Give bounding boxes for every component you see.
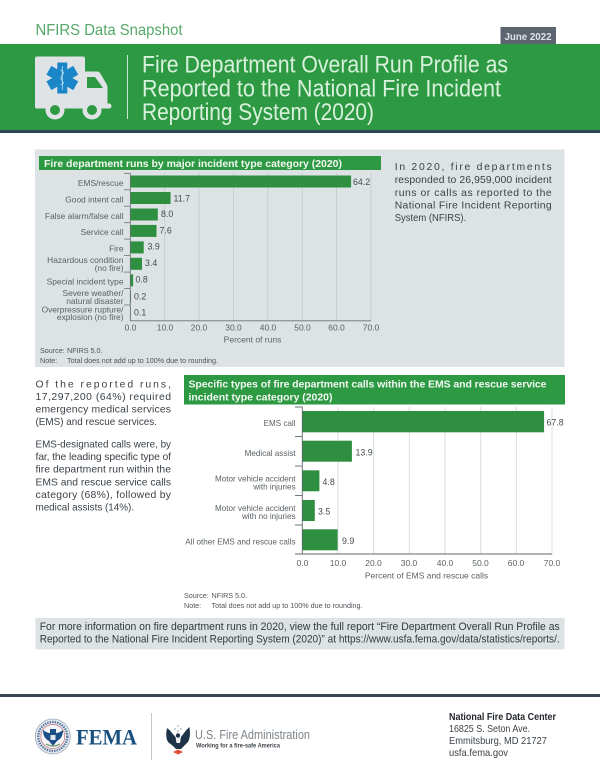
bar chart: major incident types: 0.0: [125, 322, 137, 332]
date tag: [500, 27, 556, 45]
chart heading: EMS calls: [184, 375, 565, 404]
text block: total runs: responded to 26,959,000 incident: [395, 175, 552, 186]
bar chart: EMS and rescue calls: 13.9: [356, 448, 373, 458]
chart heading: EMS calls: incident type category (2020): [188, 392, 332, 404]
text block: total runs: In 2020, fire departments: [395, 162, 552, 173]
bar chart: EMS and rescue calls: Medical assist: [245, 449, 296, 458]
bar chart: EMS and rescue calls: 0.0: [297, 558, 309, 568]
bar chart: major incident types: 3.9: [148, 242, 160, 252]
date tag: June 2022: [504, 32, 552, 43]
header band: [0, 44, 600, 133]
text block: total runs: [395, 162, 552, 224]
bar chart: major incident types: 3.4: [145, 258, 157, 268]
title: Reported to the National Fire Incident: [142, 76, 501, 102]
callout: more information: For more information on fire department runs in 2020, view the full report “Fire Department Overall Run Profile as: [40, 621, 560, 633]
bar chart: EMS and rescue calls: Motor vehicle accident: [215, 504, 296, 513]
logo: U.S. Fire Administration eagle: [166, 725, 190, 754]
bar chart: major incident types: 0.2: [134, 292, 146, 302]
bar chart: major incident types: 40.0: [260, 322, 277, 332]
source note: Note:: [40, 356, 57, 365]
logo: U.S. Fire Administration text: [195, 727, 310, 750]
text block: EMS share: [36, 379, 172, 514]
text block: EMS share: far, the leading specific type of: [36, 452, 171, 463]
bar chart: major incident types: 60.0: [328, 322, 345, 332]
bar chart: EMS and rescue calls: 70.0: [544, 558, 561, 568]
bar chart: EMS and rescue calls: 30.0: [401, 558, 418, 568]
text block: EMS share: medical assists (14%).: [36, 503, 134, 514]
text block: total runs: System (NFIRS).: [395, 213, 466, 224]
source note: EMS chart: [184, 591, 363, 610]
text block: National Fire Data Center address: Emmitsburg, MD 21727: [449, 736, 547, 747]
source note: EMS chart: NFIRS 5.0.: [212, 591, 247, 600]
bar chart: EMS and rescue calls: with injuries: [252, 482, 296, 492]
bar chart: EMS and rescue calls: EMS call: [264, 419, 296, 428]
bar chart: major incident types: Overpressure rupture/: [42, 304, 124, 314]
text block: EMS share: emergency medical services: [36, 405, 171, 416]
source note: EMS chart: Total does not add up to 100% due to rounding.: [212, 601, 363, 610]
bar chart: EMS and rescue calls: Percent of EMS and rescue calls: [365, 570, 488, 580]
bar chart: major incident types: Fire: [109, 244, 124, 254]
bar chart: major incident types: Special incident type: [47, 276, 124, 286]
bar chart: EMS and rescue calls: 10.0: [330, 558, 347, 568]
bar chart: EMS and rescue calls: [185, 406, 564, 580]
bar chart: EMS and rescue calls: 40.0: [437, 558, 454, 568]
text block: EMS share: (EMS) and rescue services.: [36, 417, 157, 428]
bar chart: major incident types: 0.1: [134, 308, 146, 318]
bar chart: major incident types: Percent of runs: [224, 334, 281, 344]
source note: EMS chart: Source:: [184, 591, 209, 600]
logo: U.S. Fire Administration text: U.S. Fire Administration: [195, 727, 310, 742]
title: Reporting System (2020): [142, 99, 374, 126]
bar chart: major incident types: False alarm/false call: [45, 211, 124, 221]
chart heading: Fire department runs by major incident type category (2020): [44, 158, 342, 170]
text block: EMS share: 17,297,200 (64%) required: [36, 392, 171, 403]
bar chart: EMS and rescue calls: 4.8: [322, 477, 335, 487]
icon: ambulance: [35, 56, 112, 120]
bar chart: major incident types: Hazardous condition: [47, 255, 124, 265]
logo: U.S. Fire Administration text: Working for a fire-safe America: [196, 744, 281, 750]
text block: National Fire Data Center address: [449, 712, 556, 759]
bar chart: major incident types: 30.0: [225, 322, 242, 332]
panel: overall run profile: [35, 150, 564, 367]
text block: EMS share: EMS and rescue service calls: [36, 477, 171, 488]
bar chart: EMS and rescue calls: with no injuries: [241, 512, 296, 521]
text block: National Fire Data Center address: 16825 S. Seton Ave.: [449, 724, 530, 735]
bar chart: major incident types: 70.0: [363, 322, 380, 332]
text block: total runs: National Fire Incident Reporting: [395, 200, 552, 212]
bar chart: major incident types: [42, 173, 380, 344]
bar chart: major incident types: 8.0: [161, 209, 173, 219]
bar chart: major incident types: 20.0: [191, 322, 208, 332]
text block: EMS share: EMS-designated calls were, by: [36, 439, 172, 450]
logo: DHS seal: [35, 719, 70, 754]
text block: EMS share: Of the reported runs,: [36, 379, 171, 390]
bar chart: major incident types: (no fire): [95, 263, 124, 273]
bar chart: EMS and rescue calls: 60.0: [508, 558, 525, 568]
chart heading: EMS calls: Specific types of fire department calls within the EMS and rescue service: [188, 378, 547, 390]
bar chart: EMS and rescue calls: 50.0: [472, 558, 489, 568]
logo: FEMA wordmark: FEMA: [76, 724, 137, 750]
footer divider: [150, 713, 153, 760]
bar chart: EMS and rescue calls: 20.0: [365, 558, 382, 568]
text block: National Fire Data Center address: usfa.fema.gov: [449, 748, 509, 759]
source note: Source:: [40, 346, 65, 355]
bar chart: EMS and rescue calls: 3.5: [318, 506, 330, 516]
title: [142, 52, 508, 126]
bar chart: major incident types: 10.0: [157, 322, 174, 332]
callout: more information: Reported to the National Fire Incident Reporting System (2020)” at https://www.usfa.fema.gov/data/statistics/reports/.: [40, 634, 560, 646]
bar chart: major incident types: EMS/rescue: [78, 178, 124, 188]
bar chart: EMS and rescue calls: 67.8: [546, 418, 564, 428]
bar chart: major incident types: 11.7: [174, 194, 190, 204]
bar chart: major incident types: explosion (no fire): [57, 312, 124, 322]
heading: NFIRS Data Snapshot: NFIRS Data Snapshot: [36, 22, 183, 39]
bar chart: major incident types: 64.2: [353, 177, 370, 187]
bar chart: major incident types: Service call: [81, 227, 124, 237]
bar chart: EMS and rescue calls: All other EMS and rescue calls: [185, 538, 296, 546]
bar chart: EMS and rescue calls: 9.9: [342, 536, 354, 546]
bar chart: major incident types: 0.8: [136, 274, 148, 284]
bar chart: major incident types: 7.6: [160, 226, 172, 236]
footer rule: [0, 694, 600, 697]
text block: National Fire Data Center address: National Fire Data Center: [449, 712, 556, 723]
bar chart: major incident types: Good intent call: [65, 194, 124, 204]
source note: EMS chart: Note:: [184, 601, 201, 610]
source note: Total does not add up to 100% due to rounding.: [67, 356, 218, 365]
bar chart: major incident types: natural disaster: [66, 296, 124, 306]
text block: EMS share: category (68%), followed by: [36, 490, 172, 501]
source note: NFIRS 5.0.: [67, 346, 103, 355]
text block: EMS share: fire department run within the: [36, 465, 171, 476]
callout: more information: [36, 618, 564, 650]
text block: total runs: runs or calls as reported to the: [395, 188, 552, 199]
title: Fire Department Overall Run Profile as: [142, 52, 508, 78]
bar chart: major incident types: Severe weather/: [62, 288, 124, 298]
bar chart: EMS and rescue calls: Motor vehicle accident: [215, 474, 296, 484]
source note: [40, 346, 218, 365]
bar chart: major incident types: 50.0: [294, 322, 311, 332]
